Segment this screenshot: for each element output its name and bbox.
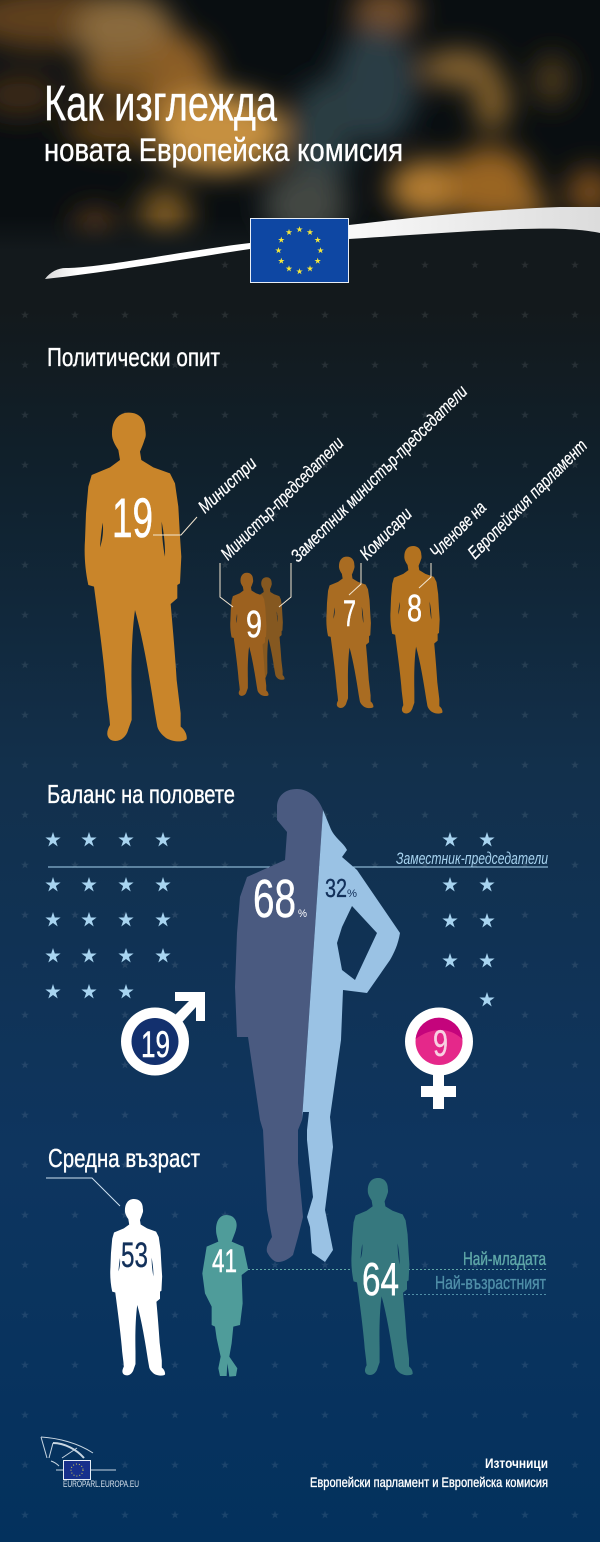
title: новата Европейска комисия [44,132,403,168]
figure: average 53: 53 [121,1236,148,1275]
sources [310,1455,548,1490]
European Parliament logo [41,1437,139,1489]
white swoosh [45,207,600,279]
female symbol with 9 [405,1008,473,1109]
figure: average 53 [110,1199,165,1376]
figure: prime ministers 9: 9 [246,604,262,646]
rotated labels: Заместник министър-председатели [287,381,471,566]
figure: oldest 64: 64 [362,1253,399,1305]
figure: youngest 41 [202,1215,248,1377]
rotated labels [194,381,591,566]
figure: youngest 41: 41 [212,1243,237,1279]
title: Как изглежда [44,76,277,132]
split figure: male 68 percent, female 32 percent: 32 [325,873,347,903]
rotated labels: Министър-председатели [217,433,348,564]
dotted lines [248,1270,546,1294]
rotated labels: Министри [194,453,260,517]
heading: political experience: Политически опит [47,342,220,372]
figure: ministers 19: 19 [112,486,153,549]
female symbol with 9: 9 [433,1023,448,1064]
rotated labels: Членове на [426,497,490,562]
figure: commissioners 7 [326,557,373,708]
split figure: male 68 percent, female 32 percent: 68 [253,869,296,929]
label: youngest: Най-младата [463,1249,547,1269]
title [44,76,403,168]
figure: prime ministers 9 [230,573,285,696]
split figure: male 68 percent, female 32 percent [235,789,400,1262]
female stars [442,832,495,1006]
header photo (blurred crowd) [0,0,600,242]
figure: commissioners 7: 7 [343,593,356,634]
figure: MEPs 8: 8 [407,588,422,630]
leader lines [153,517,431,607]
male symbol with 19: 19 [141,1024,170,1065]
male symbol with 19 [121,992,205,1076]
figure: ministers 19 [85,413,187,741]
split figure: male 68 percent, female 32 percent: % [347,888,357,900]
heading: average age: Средна възраст [48,1143,200,1173]
sources: Източници [485,1455,548,1471]
rotated labels: Комисари [356,504,416,564]
heading: gender balance: Баланс на половете [47,779,235,809]
male stars [45,832,171,998]
heading leader line [46,1178,120,1206]
split figure: male 68 percent, female 32 percent: % [298,908,307,920]
European Parliament logo: EUROPARL.EUROPA.EU [63,1479,139,1489]
EU flag [250,218,348,282]
background stars row [221,261,579,268]
vice-presidents divider line [48,866,548,868]
label: oldest: Най-възрастният [435,1273,546,1293]
figure: MEPs 8 [390,546,442,714]
figure: oldest 64 [351,1178,413,1375]
